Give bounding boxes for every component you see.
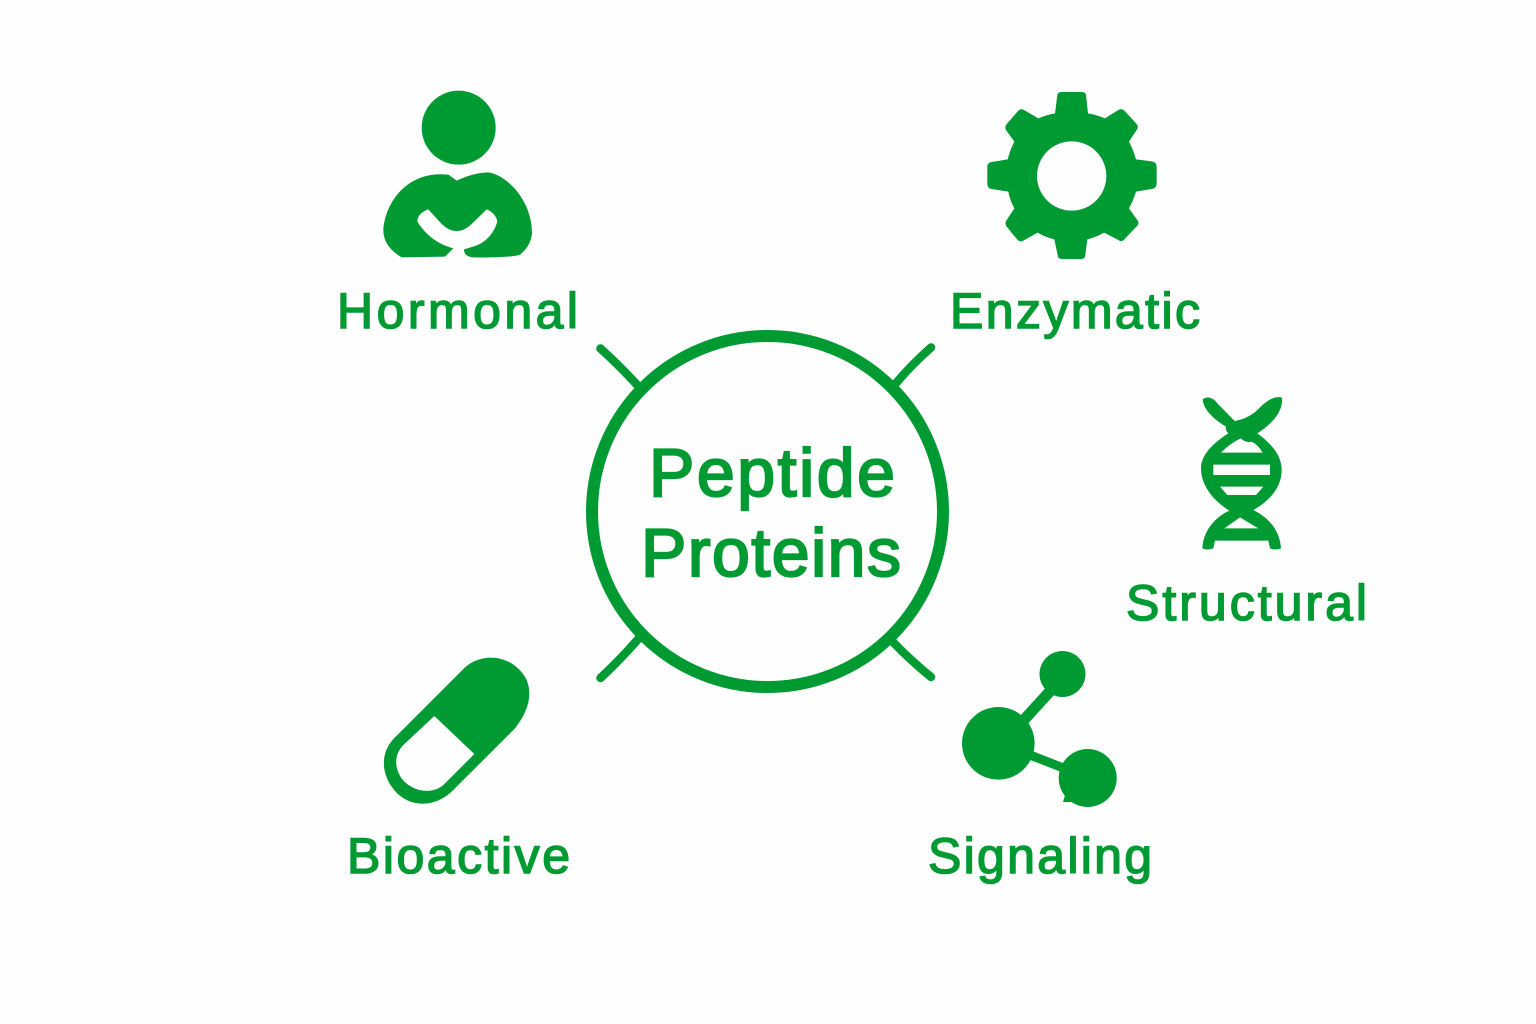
- label: Enzymatic: Enzymatic: [950, 283, 1200, 339]
- icon: structural DNA: [1201, 397, 1282, 549]
- hub title: Proteins: [641, 515, 901, 591]
- icon: bioactive capsule: [384, 658, 529, 804]
- icon: enzymatic gear: [987, 92, 1157, 259]
- connector: bottom right: [891, 640, 931, 677]
- icon: hormonal person: [383, 91, 532, 257]
- label: Bioactive: Bioactive: [347, 828, 570, 884]
- label: Structural: Structural: [1126, 575, 1367, 631]
- icon: signaling network: [962, 651, 1117, 807]
- connector: top right: [893, 348, 931, 387]
- central hub: [592, 336, 943, 687]
- connector: top left: [600, 348, 638, 386]
- label: Hormonal: Hormonal: [337, 283, 578, 339]
- label: Signaling: Signaling: [928, 828, 1152, 884]
- hub ring: [592, 336, 943, 687]
- hub title: [641, 435, 901, 591]
- hub title: Peptide: [649, 435, 895, 511]
- connector: bottom left: [600, 637, 640, 678]
